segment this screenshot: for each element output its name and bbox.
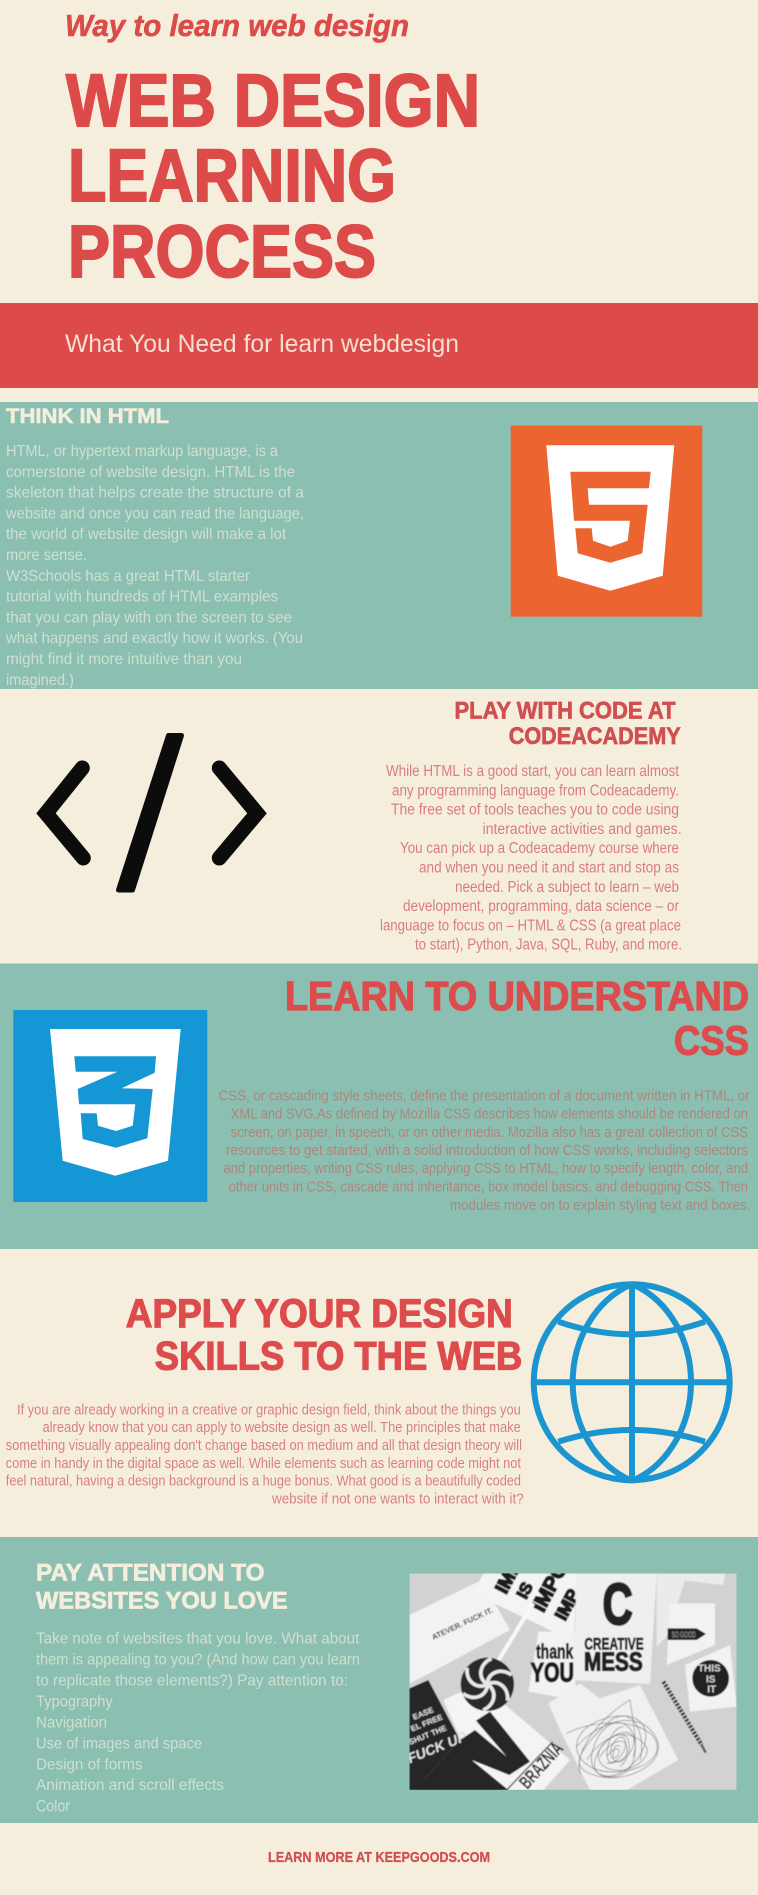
text block: things to notice: Animation and scroll effects — [36, 1777, 224, 1794]
image: creative mess photo: IMP — [551, 1586, 584, 1624]
icon: globe — [534, 1284, 730, 1481]
panel: learn css — [0, 964, 758, 1249]
image: creative mess photo: BRAZNIA — [515, 1738, 567, 1793]
text block: codeacademy description: interactive activities and games. — [483, 821, 682, 838]
text block: things to notice: them is appealing to you? (And how can you learn — [36, 1651, 360, 1668]
text block: things to notice: Color — [36, 1797, 70, 1816]
panel: think in html — [0, 402, 758, 689]
text block: html description: more sense. — [6, 547, 87, 564]
main title: LEARNING — [68, 134, 396, 217]
image: creative mess photo: EASE — [411, 1705, 436, 1722]
main title: WEB DESIGN — [66, 59, 480, 142]
text block: design skills description — [6, 1402, 524, 1508]
heading: pay attention to websites you love — [36, 1560, 288, 1614]
text block: html description — [5, 443, 304, 689]
heading: play with code at codeacademy — [454, 698, 681, 750]
icon: css3 logo — [13, 1010, 207, 1202]
heading: pay attention to websites you love: PAY ATTENTION TO — [36, 1560, 264, 1587]
text block: things to notice: Design of forms — [36, 1756, 143, 1773]
text block: css description — [219, 1088, 751, 1214]
heading: apply your design skills to the web — [126, 1292, 522, 1379]
text block: design skills description: something visually appealing don't change based on medium and all that design theory will — [6, 1438, 522, 1454]
image: creative mess photo: FUCK UP — [405, 1728, 469, 1766]
text block: html description: website and once you can read the language, — [5, 505, 304, 522]
heading: learn to understand css — [285, 973, 749, 1064]
image: creative mess photo — [405, 1557, 737, 1793]
image: creative mess photo: YOU — [531, 1658, 574, 1688]
image: creative mess photo: IMPO — [527, 1558, 573, 1616]
text block: things to notice: Typography — [36, 1694, 113, 1711]
image: creative mess photo: IMP — [492, 1557, 527, 1597]
text block: html description: that you can play with on the screen to see — [6, 609, 292, 626]
text block: codeacademy description: You can pick up a Codeacademy course where — [400, 840, 679, 857]
text block: codeacademy description: While HTML is a good start, you can learn almost — [386, 763, 680, 780]
image: creative mess photo: SO GOOD — [672, 1630, 696, 1639]
text block: design skills description: come in handy in the digital space as well. While elements such as learning code might not — [6, 1456, 521, 1472]
text block: html description: cornerstone of website design. HTML is the — [6, 464, 295, 481]
heading: play with code at codeacademy: CODEACADEMY — [509, 723, 681, 750]
text block: codeacademy description: needed. Pick a subject to learn – web — [455, 879, 679, 896]
text block: things to notice — [36, 1630, 360, 1816]
heading: play with code at codeacademy: PLAY WITH CODE AT — [454, 698, 676, 725]
image: creative mess photo: IS — [513, 1579, 537, 1602]
text block: codeacademy description: language to focus on – HTML & CSS (a great place — [380, 917, 681, 934]
image: creative mess photo: C — [603, 1573, 633, 1637]
text block: html description: W3Schools has a great HTML starter — [6, 568, 251, 585]
text block: things to notice: Take note of websites that you love. What about — [36, 1630, 360, 1647]
icon: html5 logo — [511, 426, 702, 617]
panel: apply design skills — [6, 1284, 730, 1508]
text block: codeacademy description: any programming language from Codeacademy. — [392, 782, 679, 799]
image: creative mess photo: IS — [706, 1674, 716, 1685]
heading: pay attention to websites you love: WEBSITES YOU LOVE — [36, 1587, 288, 1614]
text block: design skills description: If you are already working in a creative or graphic design field, think about the things you — [17, 1402, 521, 1418]
image: creative mess photo: THIS — [698, 1664, 721, 1675]
text block: things to notice: Use of images and space — [36, 1735, 202, 1752]
text block: html description: might find it more intuitive than you — [6, 651, 242, 668]
text block: codeacademy description: development, programming, data science – or — [403, 898, 679, 915]
text block: codeacademy description — [380, 763, 682, 954]
heading: learn to understand css: CSS — [674, 1018, 749, 1064]
image: creative mess photo: SHUT THE — [407, 1723, 448, 1747]
text block: html description: the world of website design will make a lot — [6, 526, 287, 543]
panel: websites you love — [0, 1537, 758, 1823]
text block: html description: HTML, or hypertext markup language, is a — [6, 443, 278, 460]
image: creative mess photo: IT — [707, 1684, 716, 1695]
text block: codeacademy description: The free set of tools teaches you to code using — [391, 802, 679, 819]
footer: learn more: LEARN MORE AT KEEPGOODS.COM — [268, 1850, 490, 1866]
kicker: way to learn web design: Way to learn web design — [65, 8, 409, 43]
text block: design skills description: feel natural, having a design background is a huge bonus. What good is a beautifully coded — [6, 1474, 521, 1490]
image: creative mess photo: MESS — [584, 1647, 643, 1677]
banner: what you need: What You Need for learn webdesign — [65, 330, 459, 358]
panel: play with code — [46, 698, 682, 954]
text block: things to notice: to replicate those elements?) Pay attention to: — [36, 1673, 348, 1690]
text block: codeacademy description: and when you need it and start and stop as — [419, 860, 679, 876]
image: creative mess photo: ATEVER. FUCK IT. — [430, 1606, 494, 1642]
text block: html description: tutorial with hundreds of HTML examples — [6, 589, 278, 606]
heading: apply your design skills to the web: APPLY YOUR DESIGN — [126, 1292, 513, 1336]
text block: codeacademy description: to start), Python, Java, SQL, Ruby, and more. — [415, 937, 682, 954]
banner: what you need — [0, 303, 758, 388]
image: creative mess photo: CREATIVE — [584, 1634, 644, 1653]
image: creative mess photo: EL FREE — [409, 1712, 445, 1734]
text block: design skills description: website if not one wants to interact with it? — [271, 1492, 524, 1508]
text block: things to notice: Navigation — [36, 1714, 107, 1731]
text block: html description: what happens and exactly how it works. (You — [5, 630, 303, 647]
icon: code brackets — [46, 736, 257, 890]
image: creative mess photo: thank — [536, 1640, 574, 1663]
text block: html description: skeleton that helps create the structure of a — [6, 485, 304, 502]
heading: apply your design skills to the web: SKILLS TO THE WEB — [155, 1335, 522, 1379]
heading: think in html: THINK IN HTML — [6, 404, 169, 428]
text block: html description: imagined.) — [6, 672, 74, 689]
text block: design skills description: already know that you can apply to website design as well. The principles that make — [42, 1420, 521, 1436]
main title — [66, 59, 480, 293]
main title: PROCESS — [68, 210, 376, 293]
